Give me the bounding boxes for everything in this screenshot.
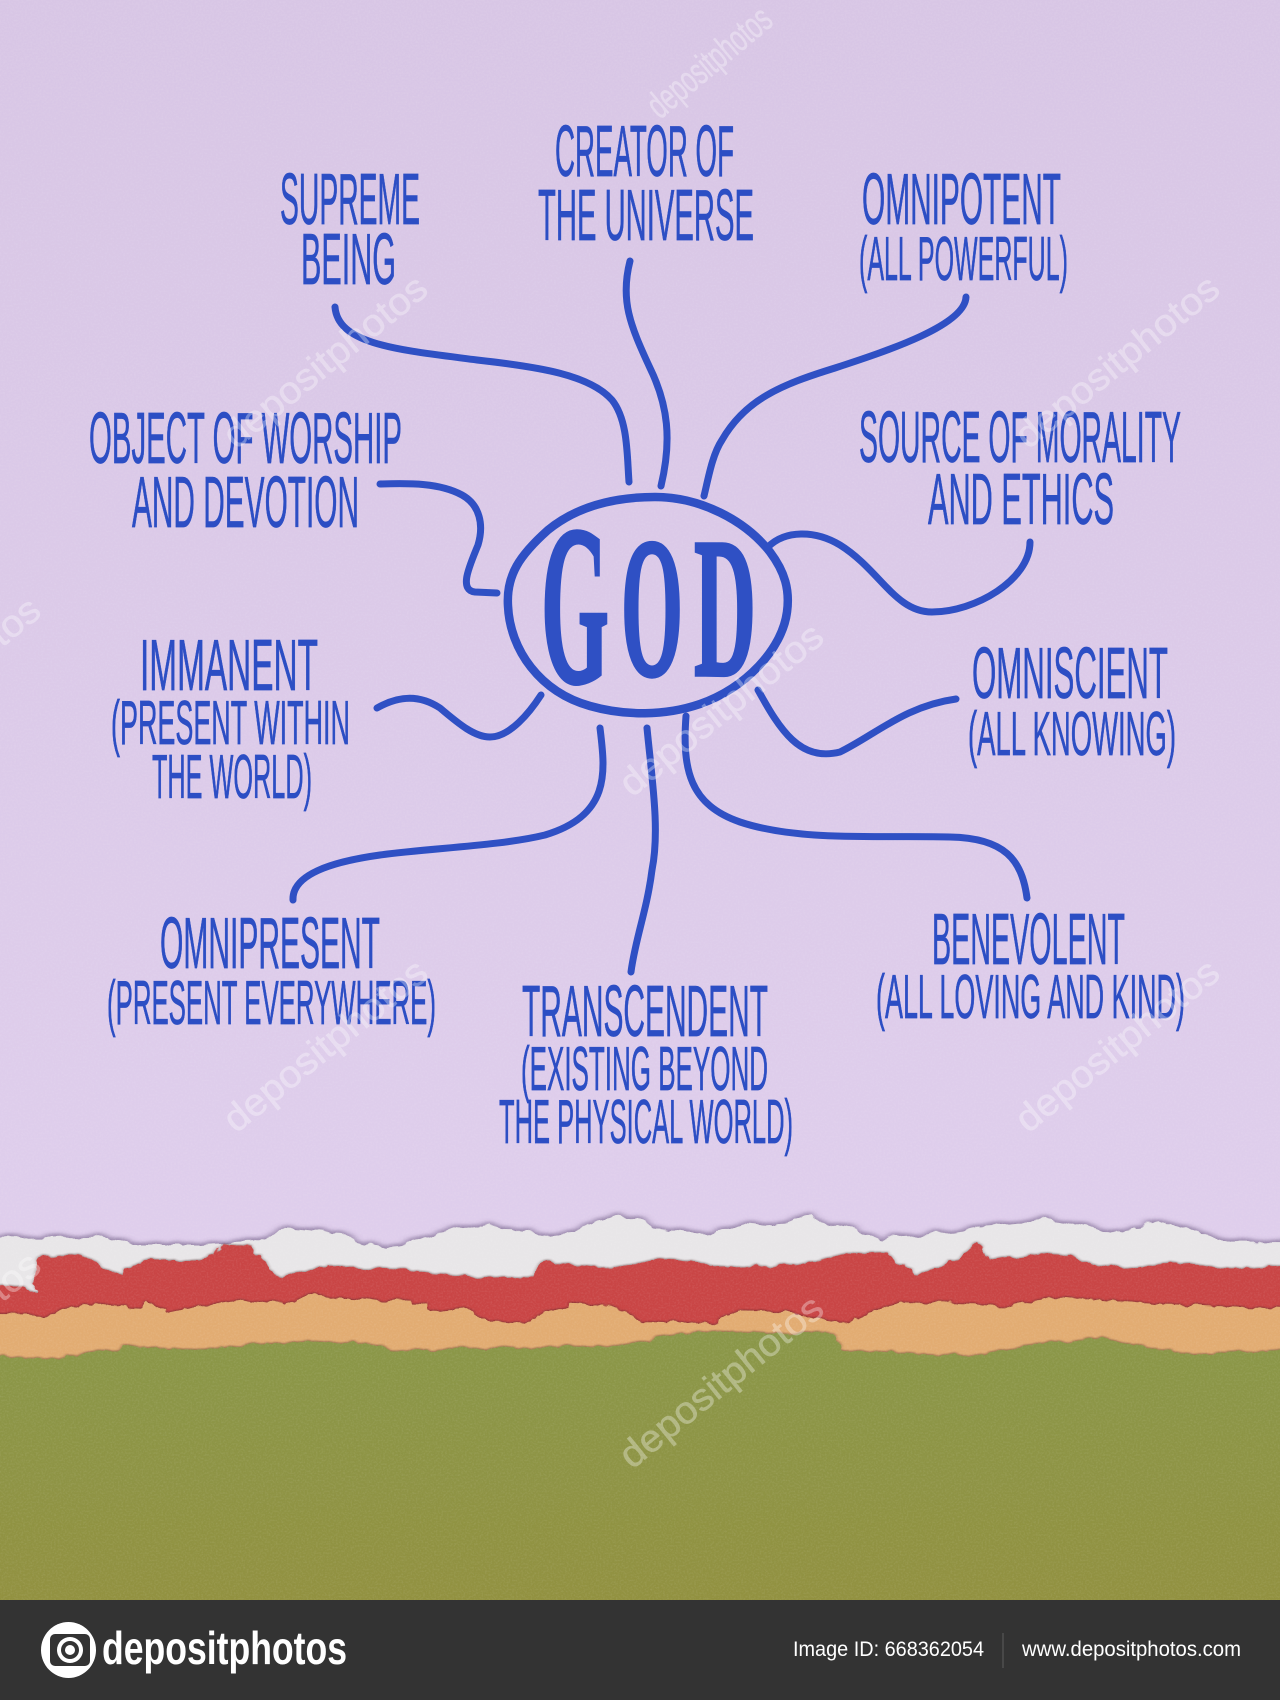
- text: benevolent: [876, 900, 1185, 1032]
- connector: creator of the universe: [626, 261, 667, 486]
- panel: torn paper layers: [0, 1213, 1280, 1603]
- text: immanent: IMMANENT: [140, 626, 318, 706]
- connector: omnipresent: [293, 728, 603, 900]
- connector: immanent: [377, 695, 541, 737]
- central node: GOD oval: [508, 480, 788, 732]
- connector: benevolent: [685, 716, 1027, 898]
- layer: green paper: [0, 1332, 1280, 1603]
- text: object of worship and devotion: [89, 399, 402, 543]
- text: omniscient: [968, 634, 1176, 769]
- infographic: TRANSCENDENT: [522, 972, 768, 1052]
- text: immanent: [111, 626, 350, 812]
- text: omnipotent: [859, 160, 1068, 294]
- infographic: AND DEVOTION: [132, 463, 359, 543]
- connector: supreme being: [335, 307, 629, 482]
- connector: source of morality: [768, 534, 1030, 612]
- icon: camera logo: [41, 1622, 96, 1678]
- text: supreme being: [280, 160, 420, 300]
- footer bar: [0, 1600, 1280, 1700]
- panel: lilac paper background: [0, 0, 1280, 1300]
- infographic: (PRESENT EVERYWHERE): [107, 969, 436, 1038]
- layer: white paper: [0, 1213, 1280, 1330]
- connector: omniscient: [758, 690, 956, 754]
- text: omnipresent: [107, 904, 436, 1038]
- watermarks: depositphotos: [215, 267, 436, 457]
- connector: object of worship: [380, 484, 497, 593]
- infographic: OBJECT OF WORSHIP: [89, 399, 402, 479]
- label: GOD: G: [541, 480, 609, 732]
- image id: Image ID: 668362054: [793, 1638, 984, 1661]
- connector: transcendent: [631, 728, 655, 972]
- central node: GOD oval: D: [694, 498, 756, 719]
- layer: orange paper: [0, 1295, 1280, 1397]
- infographic: (PRESENT WITHIN: [111, 689, 350, 758]
- text: supreme being: BEING: [301, 220, 396, 300]
- infographic: THE PHYSICAL WORLD): [499, 1088, 793, 1157]
- text: transcendent: [499, 972, 793, 1157]
- website url: www.depositphotos.com: [1021, 1638, 1241, 1661]
- text: creator of the universe: [538, 112, 754, 256]
- oval outline: [508, 497, 788, 713]
- text: source of morality and ethics: [859, 398, 1181, 540]
- layer: red paper: [0, 1243, 1280, 1363]
- watermarks: depositphotos: [215, 951, 436, 1141]
- text: omnipresent: OMNIPRESENT: [160, 904, 380, 984]
- logo wordmark: depositphotos: [102, 1622, 347, 1674]
- watermarks: depositphotos: [611, 1287, 832, 1477]
- watermarks: depositphotos: [1007, 951, 1228, 1141]
- infographic: CREATOR OF: [555, 112, 734, 192]
- label: GOD: O: [621, 498, 683, 719]
- infographic: SUPREME: [280, 160, 420, 240]
- connector: omnipotent: [704, 297, 966, 496]
- infographic: (EXISTING BEYOND: [521, 1035, 768, 1104]
- watermarks: depositphotos: [1007, 267, 1228, 457]
- text: immanent: THE WORLD): [152, 743, 312, 812]
- watermarks: depositphotos: [611, 615, 832, 805]
- infographic: THE UNIVERSE: [538, 176, 754, 256]
